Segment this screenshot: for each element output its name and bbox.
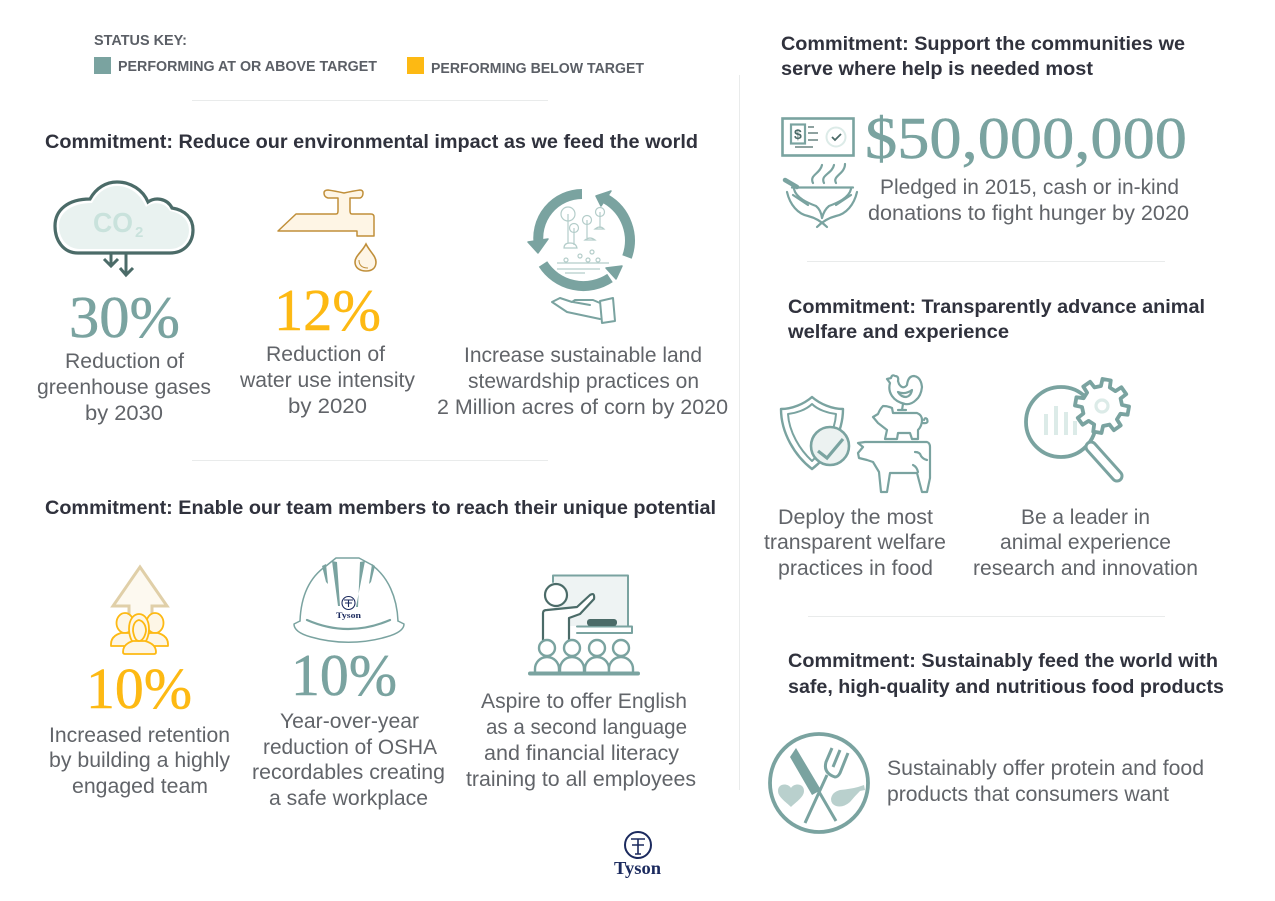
logo: Tyson — [614, 832, 661, 878]
stat: $50,000,000: $50,000,000 — [865, 105, 1187, 171]
text: welfare practices — [764, 505, 946, 580]
text: greenhouse gases: greenhouse gases — [37, 375, 211, 399]
text: OSHA: reduction of OSHA — [263, 735, 438, 759]
text: animal experience research — [973, 505, 1198, 580]
icon: CO2 cloud — [55, 182, 193, 275]
text: protein and food products: Sustainably offer protein and food — [887, 756, 1204, 780]
text: protein and food products — [887, 756, 1204, 806]
text: land stewardship: Increase sustainable land — [464, 343, 702, 367]
status key legend: PERFORMING BELOW TARGET — [431, 61, 644, 77]
text: OSHA: Year-over-year — [280, 709, 419, 733]
icon: water faucet — [278, 190, 376, 271]
text: retention — [49, 723, 230, 798]
text: animal experience research: animal experience — [1000, 530, 1171, 554]
text: water use: water use intensity — [239, 368, 415, 392]
icon: hard hat — [294, 558, 404, 642]
text: welfare practices: transparent welfare — [764, 530, 946, 554]
icon: classroom — [530, 576, 638, 674]
heading: food products commitment: safe, high-quality and nutritious food products — [788, 676, 1224, 698]
status key legend: PERFORMING AT OR ABOVE TARGET — [118, 59, 377, 75]
heading: communities commitment — [781, 33, 1185, 80]
heading: communities commitment: Commitment: Support the communities we — [781, 33, 1185, 55]
logo: Tyson: Tyson — [614, 858, 661, 878]
icon: CO2 cloud: CO — [93, 207, 133, 238]
text: water use — [239, 342, 415, 418]
text: greenhouse gases: Reduction of — [65, 349, 184, 373]
icon: shield with check — [781, 397, 849, 469]
text: water use: Reduction of — [266, 342, 385, 366]
text: animal experience research: Be a leader in — [1021, 505, 1150, 529]
icon: knife fork circle — [770, 734, 868, 832]
text: greenhouse gases: by 2030 — [85, 401, 163, 425]
text: welfare practices: Deploy the most — [778, 505, 933, 529]
icon: magnifier and gear — [1026, 375, 1133, 476]
text: protein and food products: products that consumers want — [887, 782, 1169, 806]
icon: arrow with team — [111, 567, 168, 654]
text: English and financial literacy: training to all employees — [466, 767, 696, 791]
heading: environmental commitment: Commitment: Reduce our environmental impact as we feed the world — [45, 131, 698, 153]
icon: CO2 cloud: 2 — [135, 224, 143, 241]
text: English and financial literacy: as a second language — [486, 715, 687, 739]
status key legend: STATUS KEY: — [94, 33, 187, 49]
icon: bowl in hands — [785, 164, 857, 227]
stat: 10% OSHA: 10% — [291, 642, 397, 708]
heading: food products commitment: Commitment: Sustainably feed the world with — [788, 650, 1218, 672]
text: land stewardship — [437, 343, 728, 419]
text: land stewardship: 2 Million acres of corn by 2020 — [437, 395, 728, 419]
text: pledged donations — [868, 175, 1189, 225]
text: welfare practices: practices in food — [778, 556, 933, 580]
heading: animal welfare commitment — [787, 296, 1205, 343]
text: retention: by building a highly — [49, 748, 230, 772]
text: pledged donations: Pledged in 2015, cash or in-kind — [880, 175, 1179, 199]
heading: animal welfare commitment: Commitment: Transparently advance animal — [788, 296, 1205, 318]
text: English and financial literacy — [466, 689, 696, 791]
heading: food products commitment — [788, 650, 1224, 698]
icon: donation check: $ — [794, 126, 802, 142]
text: OSHA: a safe workplace — [269, 786, 428, 810]
heading: communities commitment: serve where help is needed most — [781, 58, 1094, 80]
icon: hard hat: Tyson — [336, 610, 361, 620]
text: retention: engaged team — [72, 774, 208, 798]
stat: 30%: 30% — [69, 284, 180, 350]
icon: land stewardship cycle — [528, 191, 630, 323]
stat: 12%: 12% — [274, 277, 381, 343]
text: water use: by 2020 — [288, 394, 367, 418]
text: greenhouse gases — [37, 349, 211, 425]
text: animal experience research: research and innovation — [973, 556, 1198, 580]
icon: chicken pig cow — [858, 375, 930, 492]
heading: animal welfare commitment: welfare and experience — [787, 321, 1009, 343]
heading: team members commitment: Commitment: Enable our team members to reach their unique potential — [45, 497, 716, 519]
stat: 10% retention: 10% — [86, 656, 192, 721]
text: OSHA — [252, 709, 445, 810]
text: pledged donations: donations to fight hunger by 2020 — [868, 201, 1189, 225]
status key legend — [94, 33, 644, 77]
text: English and financial literacy: Aspire to offer English — [481, 689, 687, 713]
icon: donation check — [782, 118, 854, 156]
text: OSHA: recordables creating — [252, 760, 445, 784]
text: retention: Increased retention — [49, 723, 230, 747]
text: English and financial literacy: and financial literacy — [484, 741, 679, 765]
text: land stewardship: stewardship practices on — [468, 369, 699, 393]
